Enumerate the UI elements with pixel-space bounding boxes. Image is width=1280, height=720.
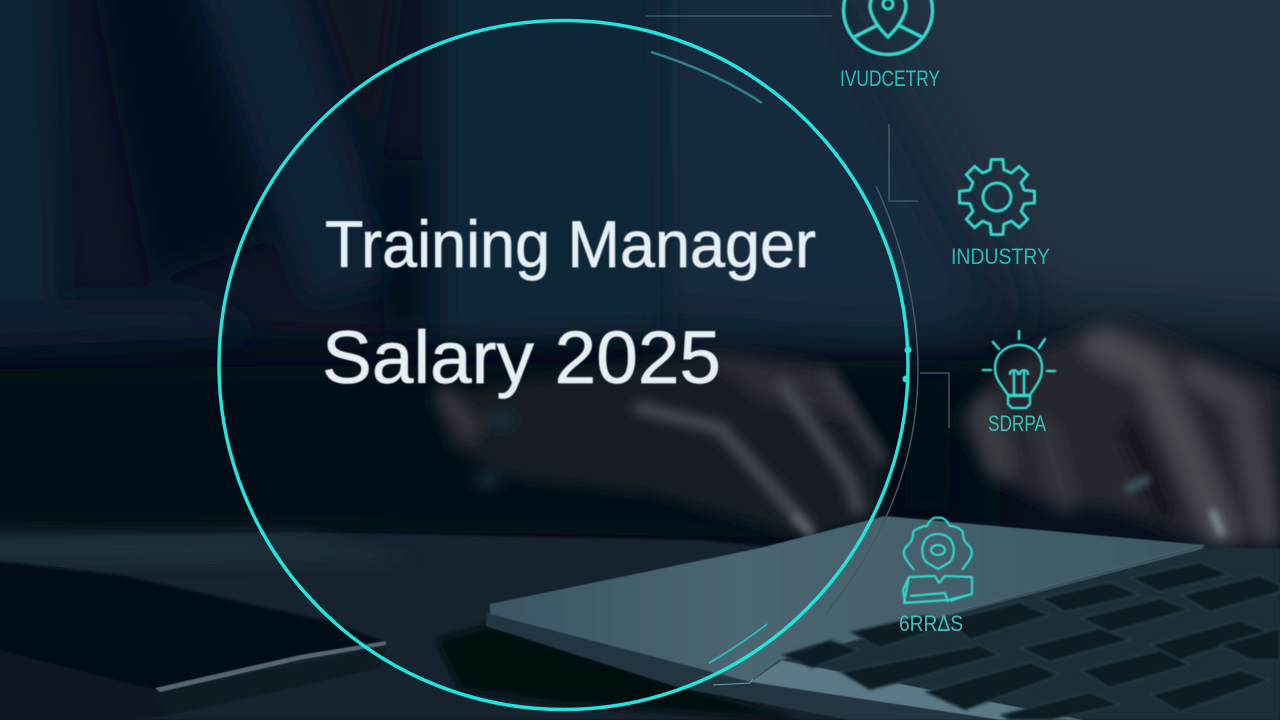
connector lines xyxy=(646,16,949,428)
icon: gear xyxy=(960,160,1034,234)
tablet on the desk xyxy=(0,555,386,720)
jacket base, left xyxy=(0,0,640,340)
circle accents: arcs and nodes xyxy=(651,52,918,685)
right hand xyxy=(905,318,1280,545)
jacket sleeve, right xyxy=(620,0,1020,350)
keyboard keys xyxy=(782,562,1280,720)
icon: gear over open book xyxy=(903,518,972,603)
label: top icon: IVUDCETRY xyxy=(840,66,940,91)
shadow below laptop xyxy=(437,625,800,720)
fingertip glints xyxy=(1125,478,1222,535)
dark band under sleeves xyxy=(0,360,1000,540)
main teal circle xyxy=(219,20,908,710)
wall behind the person xyxy=(760,0,1280,350)
laptop edge highlights xyxy=(780,545,1205,664)
icon: light bulb xyxy=(983,331,1055,408)
jacket folds xyxy=(0,0,660,350)
left fingertip xyxy=(795,517,811,533)
laptop palm rest xyxy=(490,516,1205,682)
left hand xyxy=(430,350,885,540)
title xyxy=(322,207,816,399)
title: Training Manager xyxy=(325,207,816,281)
title: Salary 2025 xyxy=(322,316,721,399)
icon: location pin in circle xyxy=(844,0,932,54)
left hand ridges xyxy=(640,375,881,526)
label: gear icon: INDUSTRY xyxy=(951,244,1050,269)
label: book icon: 6RRΔS xyxy=(899,611,963,636)
keyboard deck xyxy=(782,548,1280,720)
desk surface xyxy=(0,532,900,720)
label: bulb icon: SDRPA xyxy=(988,411,1046,436)
laptop side face xyxy=(486,612,1000,720)
